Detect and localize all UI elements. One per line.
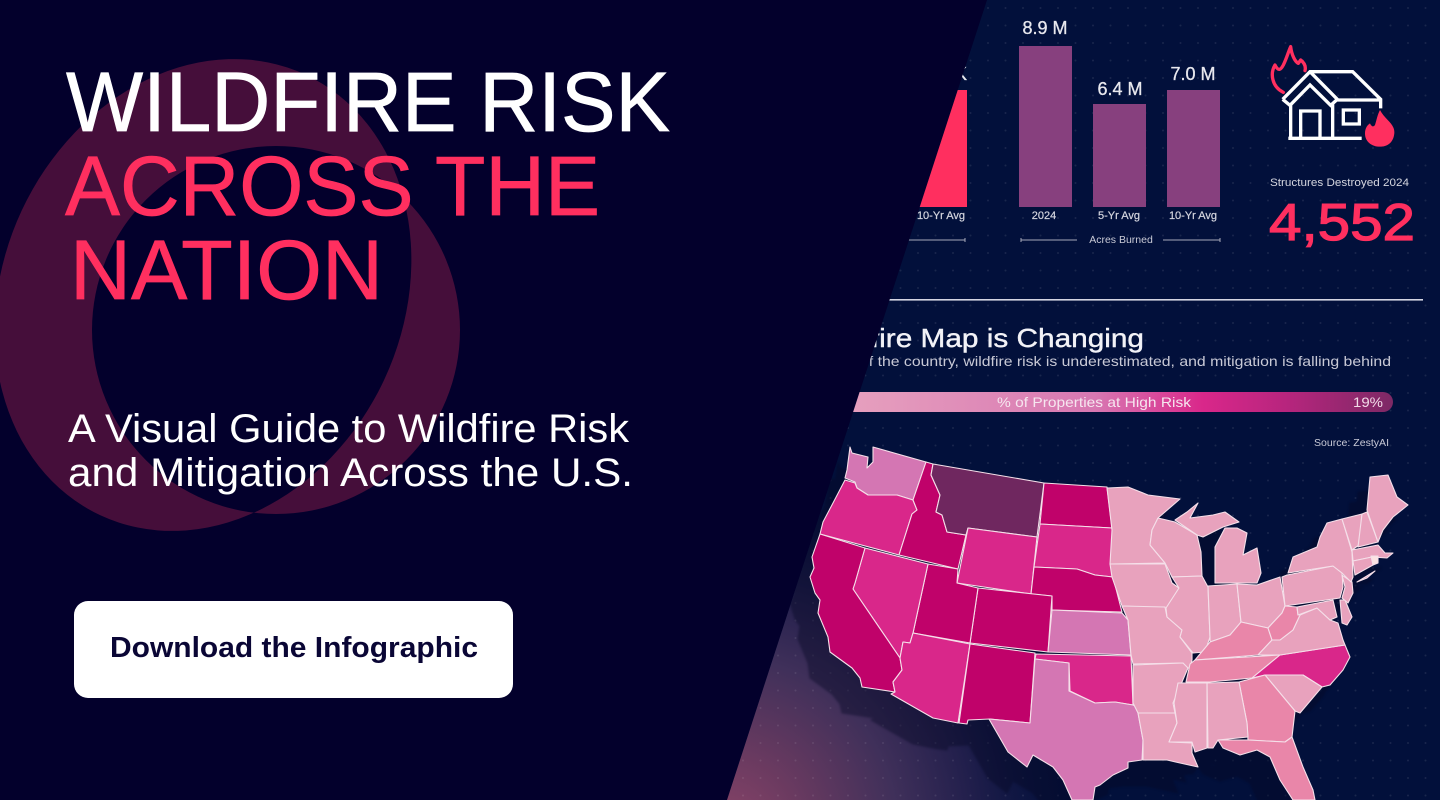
bar chart: acres burned: 6.4 M [1097,79,1143,99]
state: Utah [913,564,978,643]
state: Washington [845,447,926,500]
state: Mississippi [1169,683,1207,752]
title: WILDFIRE RISK [66,55,670,149]
state: West Virginia [1268,606,1313,640]
bar chart: acres burned: 8.9 M [1022,18,1068,38]
state: Illinois [1166,576,1210,653]
bar chart: acres burned: 10-Yr Avg [1169,210,1217,222]
text: source: Source: ZestyAI [1314,438,1389,449]
state: Maryland [1297,600,1337,620]
state: California [810,534,902,692]
subtitle: A Visual Guide to Wildfire Risk [68,407,630,451]
state: Nevada [853,548,928,658]
button: download the infographic [74,601,513,698]
state: Michigan upper [1175,503,1239,537]
state: New Jersey [1342,575,1353,603]
state: Maine [1367,475,1408,542]
state: Michigan lower [1215,528,1261,583]
state: Arkansas [1133,663,1188,713]
state: North Dakota [1040,483,1112,528]
button: download the infographic: Download the Infographic [110,632,478,664]
state: Virginia [1258,608,1345,655]
state: Texas [989,659,1143,800]
state: Pennsylvania [1282,566,1343,606]
state: Rhode Island [1371,556,1378,565]
state: Oregon [820,480,917,555]
state: New York [1288,519,1353,582]
state: Ohio [1237,577,1285,628]
decorative overlapping rings [0,59,460,531]
bar chart: acres burned: 7.0 M [1170,64,1216,84]
state: North Carolina [1252,645,1350,687]
subtitle: and Mitigation Across the U.S. [68,451,633,495]
state: Massachusetts [1352,545,1393,561]
state: Louisiana [1138,713,1198,767]
state: Wisconsin [1150,518,1202,577]
state: Florida [1218,737,1315,800]
state: Iowa [1110,564,1179,608]
subtitle [68,407,633,495]
title: ACROSS THE [65,139,600,233]
state: Arizona [891,633,970,723]
bar chart: acres burned: 10-Yr Avg [917,210,965,222]
state: Indiana [1208,584,1241,642]
panel: infographic preview [700,0,1440,800]
bar chart: acres burned [900,18,1220,246]
state: Alabama [1207,682,1248,748]
legend bar: percent of properties at high risk: 19% [1353,394,1383,410]
map shadow [790,462,1396,800]
state: South Dakota [1034,524,1113,577]
map: property risk by state [810,447,1408,800]
bar chart: acres burned: K [955,64,967,84]
state: Colorado [970,588,1052,652]
icon: burning house [1272,47,1394,147]
state: Nebraska [1031,567,1122,612]
state: Kansas [1048,610,1131,655]
legend bar: percent of properties at high risk: % of Properties at High Risk [997,394,1192,410]
state: Minnesota [1107,487,1180,564]
state: Oklahoma [1035,654,1133,705]
state: Connecticut [1353,557,1373,575]
state: Vermont [1342,514,1362,550]
state: South Carolina [1265,675,1322,713]
bar chart: acres burned: 5-Yr Avg [1098,210,1140,222]
state: Idaho [899,462,966,569]
title [65,55,670,317]
heading: wildfire map: Wildfire Map is Changing [813,323,1144,353]
title: NATION [70,223,383,317]
state: Tennessee [1186,655,1280,682]
legend bar: percent of properties at high risk [800,392,1393,412]
state: Georgia [1239,675,1295,742]
state: New Mexico [959,644,1035,724]
stat: structures destroyed [1269,177,1415,252]
state: Kentucky [1195,622,1272,660]
state: Long Island [1357,571,1375,582]
state: Delaware [1340,600,1352,625]
bar chart: acres burned: Acres Burned [1089,234,1153,246]
state: Montana [931,464,1044,537]
state: New Hampshire [1358,512,1378,547]
stat: structures destroyed: 4,552 [1269,194,1415,252]
text: map description: of the country, wildfire risk is underestimated, and mitigation is falling behind [860,353,1391,369]
state: Wyoming [957,528,1037,594]
stat: structures destroyed: Structures Destroyed 2024 [1270,177,1409,189]
bar chart: acres burned: 2024 [1032,210,1056,222]
state: Missouri [1122,606,1192,668]
